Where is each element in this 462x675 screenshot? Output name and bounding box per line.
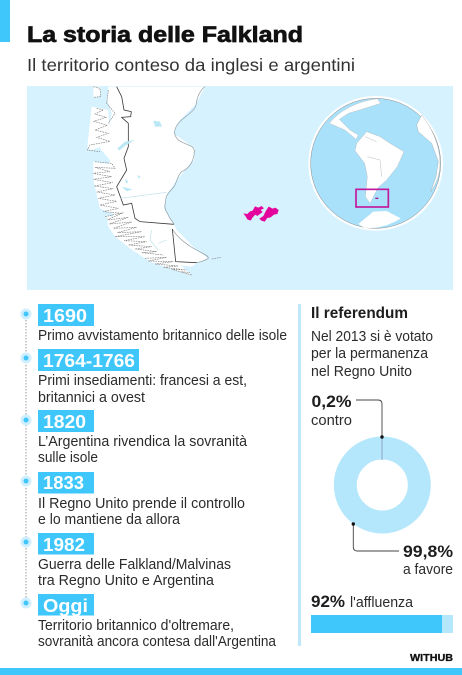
referendum description xyxy=(311,329,433,380)
callout: 99,8% a favore: a favore xyxy=(403,562,453,578)
timeline item: 1820: L’Argentina rivendica la sovranità xyxy=(38,434,248,450)
turnout bar xyxy=(311,615,453,633)
map: lakes xyxy=(117,121,162,191)
timeline item: 1690: Primo avvistamento britannico delle isole xyxy=(38,328,287,344)
referendum description: Nel 2013 si è votato xyxy=(311,329,433,345)
referendum description: nel Regno Unito xyxy=(311,364,412,380)
accent bar: bottom xyxy=(0,668,462,675)
panel: map xyxy=(27,86,453,290)
timeline item: 1982: 1982 xyxy=(43,534,85,555)
turnout label: 92% xyxy=(311,592,345,611)
timeline item: 1690: 1690 xyxy=(43,305,87,326)
map: locator globe xyxy=(308,96,443,231)
timeline item: Oggi xyxy=(20,594,277,650)
callout: 0,2% contro xyxy=(311,392,384,439)
timeline item: 1833: 1833 xyxy=(43,472,84,493)
map: Falkland Islands xyxy=(243,206,279,222)
timeline item: 1690 xyxy=(20,304,287,344)
referendum heading: Il referendum xyxy=(311,305,408,322)
timeline item: 1982 xyxy=(20,533,231,589)
timeline item: 1833 xyxy=(20,472,245,528)
timeline item: 1982: Guerra delle Falkland/Malvinas xyxy=(38,557,231,573)
timeline item: Oggi: sovranità ancora contesa dall'Argentina xyxy=(38,634,277,650)
timeline item: 1764-1766 xyxy=(20,349,247,406)
callout: 99,8% a favore xyxy=(352,522,453,578)
timeline item: 1982: tra Regno Unito e Argentina xyxy=(38,573,215,589)
map: borders xyxy=(117,87,197,263)
timeline item: 1820: sulle isole xyxy=(38,450,98,466)
timeline item: 1820 xyxy=(20,410,248,466)
map: Patagonia xyxy=(87,87,279,275)
accent bar: top left xyxy=(0,0,10,42)
logo: WITHUB: WITHUB xyxy=(410,653,453,664)
callout: 99,8% a favore: 99,8% xyxy=(403,542,453,561)
timeline item: Oggi: Territorio britannico d'oltremare, xyxy=(38,618,234,634)
title: La storia delle Falkland xyxy=(27,22,303,47)
timeline item: 1820: 1820 xyxy=(43,411,86,432)
callout: 0,2% contro: contro xyxy=(311,413,352,429)
timeline line xyxy=(25,314,27,603)
timeline item: 1833: e lo mantiene da allora xyxy=(38,512,181,528)
timeline item: 1764-1766: Primi insediamenti: francesi a est, xyxy=(38,373,247,389)
turnout label: l'affluenza xyxy=(350,595,414,611)
panel: referendum xyxy=(311,305,453,633)
vertical panel rule xyxy=(298,304,301,646)
timeline item: 1833: Il Regno Unito prende il controllo xyxy=(38,496,245,512)
map: fjords and islands of the Chilean coast xyxy=(87,87,221,275)
timeline item: 1764-1766: 1764-1766 xyxy=(43,350,135,371)
callout: 0,2% contro: 0,2% xyxy=(312,392,352,411)
globe: highlight box xyxy=(356,189,388,207)
referendum description: per la permanenza xyxy=(311,346,429,362)
donut chart xyxy=(345,437,419,522)
turnout label xyxy=(311,592,414,611)
timeline item: Oggi: Oggi xyxy=(43,595,88,616)
subtitle: Il territorio conteso da inglesi e argentini xyxy=(27,55,355,75)
timeline item: 1764-1766: britannici a ovest xyxy=(38,390,145,406)
